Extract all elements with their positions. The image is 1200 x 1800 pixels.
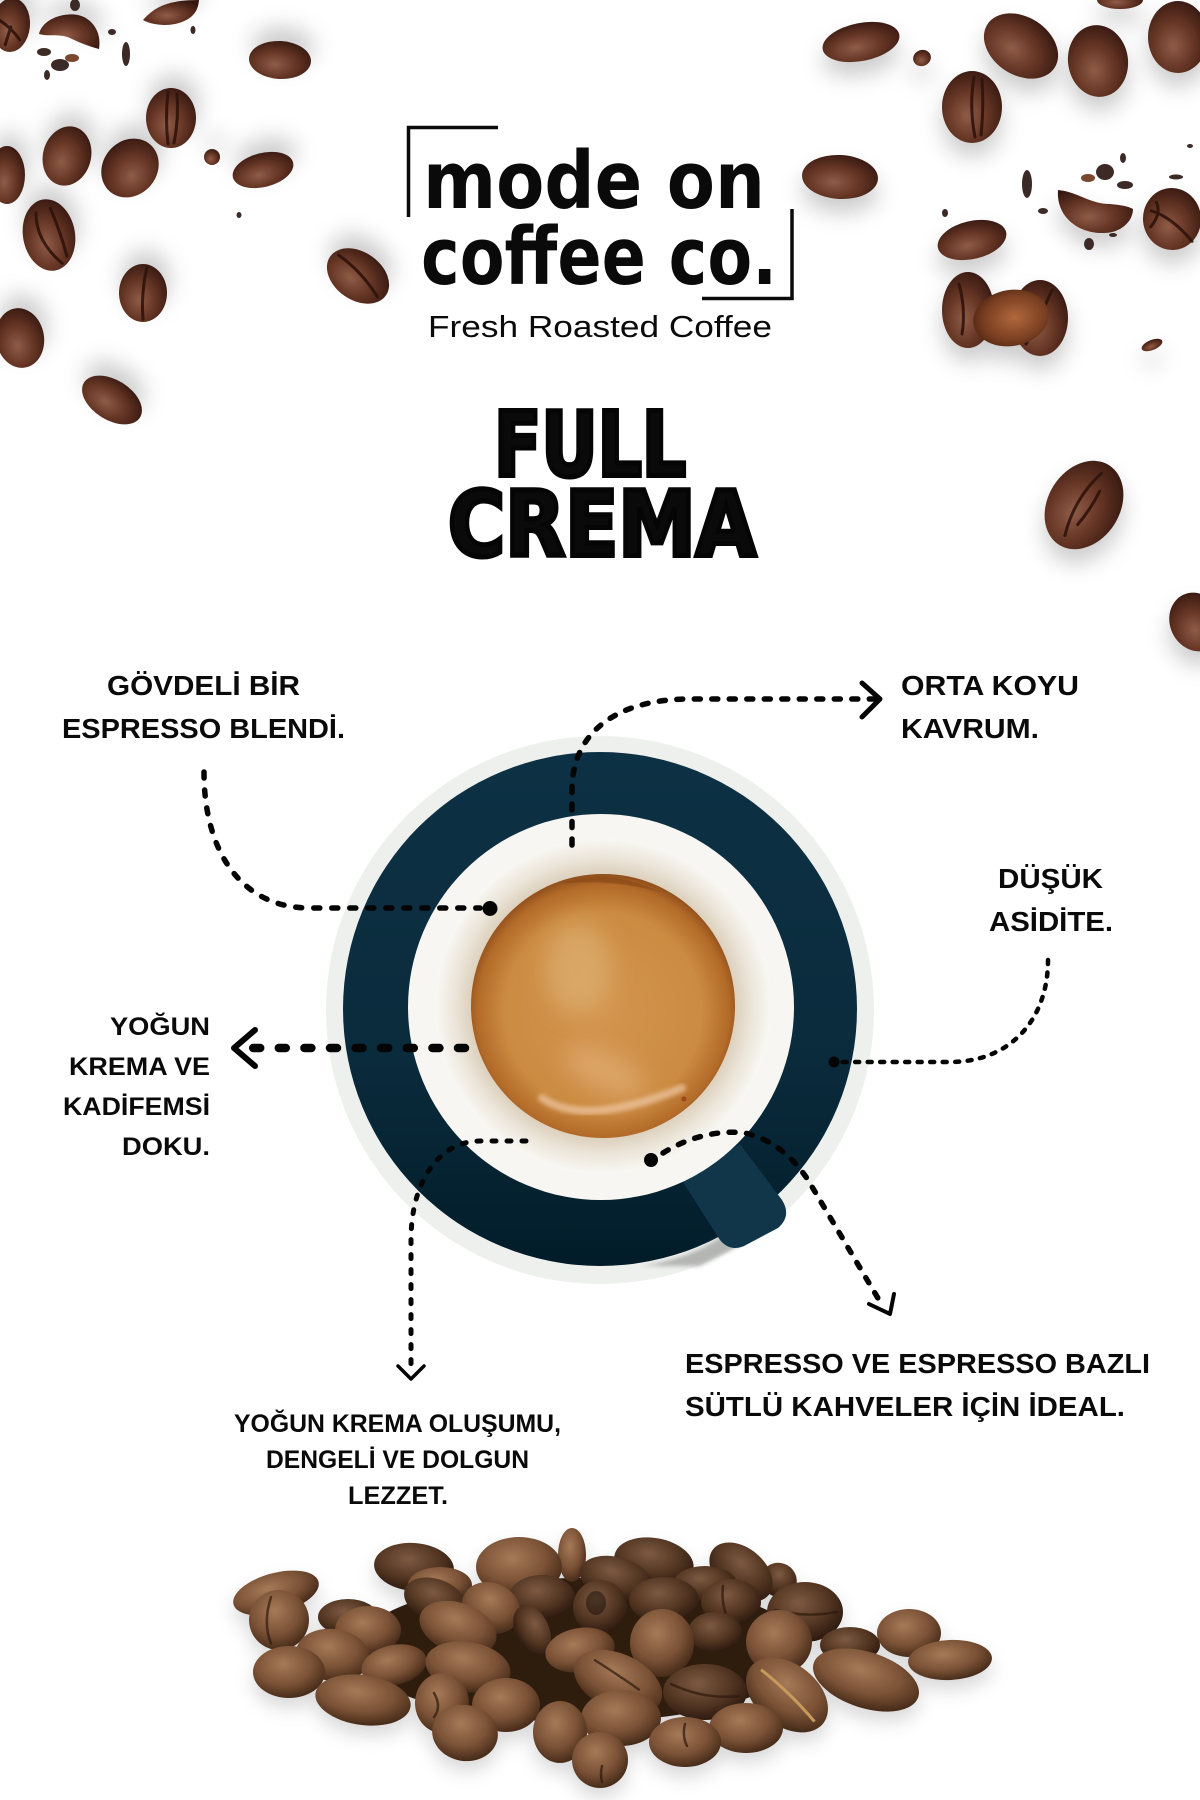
crumbs: top left: [37, 0, 242, 218]
callout: düşük asidite: [828, 863, 1113, 1068]
bean pile: [228, 1528, 993, 1788]
cup handle: [683, 1144, 786, 1248]
callout text: ORTA KOYU: [901, 670, 1079, 701]
dotted arrow right: [572, 683, 880, 845]
crumbs: top right: [942, 144, 1193, 250]
callout: espresso ve sütlü kahveler: [644, 1132, 1150, 1422]
dotted arrow down: [398, 1141, 526, 1379]
callout text: YOĞUN: [110, 1012, 210, 1041]
beans: top right scatter: [801, 0, 1200, 660]
title: Full Crema: [448, 392, 756, 578]
callout text: [685, 1348, 1150, 1422]
callout text: [989, 863, 1113, 937]
callout text: DOKU.: [122, 1133, 210, 1161]
callout text: LEZZET.: [348, 1482, 448, 1510]
logo wordmark: [421, 135, 777, 303]
callout text: ESPRESSO VE ESPRESSO BAZLI: [685, 1348, 1150, 1379]
callout text: GÖVDELİ BİR: [107, 670, 300, 701]
logo: mode on coffee co.: [408, 128, 792, 344]
callout text: KAVRUM.: [901, 713, 1039, 744]
logo wordmark: mode on: [423, 135, 765, 227]
callout: orta koyu kavrum: [572, 670, 1079, 845]
dotted arrow diagonal: [644, 1132, 894, 1314]
logo tagline: Fresh Roasted Coffee: [428, 309, 772, 344]
callout text: [234, 1409, 561, 1510]
logo bracket top left: [408, 128, 498, 217]
title: Full Crema: CREMA: [448, 472, 756, 578]
callout: yoğun krema ve kadifemsi doku: [63, 1012, 465, 1161]
dotted arrow left: [234, 1030, 465, 1066]
dotted line to saucer: [828, 960, 1048, 1068]
callout text: YOĞUN KREMA OLUŞUMU,: [234, 1409, 561, 1438]
cup inner wall: [435, 838, 771, 1174]
logo wordmark: coffee co.: [421, 211, 777, 303]
callout text: [63, 1012, 210, 1161]
beans: top left scatter: [0, 0, 400, 434]
callout text: SÜTLÜ KAHVELER İÇİN İDEAL.: [685, 1391, 1125, 1422]
callout text: ESPRESSO BLENDİ.: [62, 713, 345, 744]
callout text: DENGELİ VE DOLGUN: [266, 1446, 529, 1474]
callout text: [62, 670, 345, 744]
cup body: [408, 814, 794, 1200]
callout text: [901, 670, 1079, 744]
callout: gövdeli bir espresso blendi: [62, 670, 498, 916]
callout text: DÜŞÜK: [998, 863, 1103, 894]
saucer: [326, 736, 874, 1284]
dotted arrow to crema edge: [204, 772, 498, 916]
callout text: KADİFEMSİ: [63, 1093, 210, 1121]
espresso crema: [471, 874, 735, 1138]
callout text: ASİDİTE.: [989, 906, 1113, 937]
logo bracket bottom right: [702, 209, 792, 298]
callout: yoğun krema oluşumu: [234, 1141, 561, 1510]
cup and saucer illustration: [326, 736, 874, 1284]
callout text: KREMA VE: [69, 1053, 210, 1081]
title: Full Crema: FULL: [494, 392, 686, 496]
